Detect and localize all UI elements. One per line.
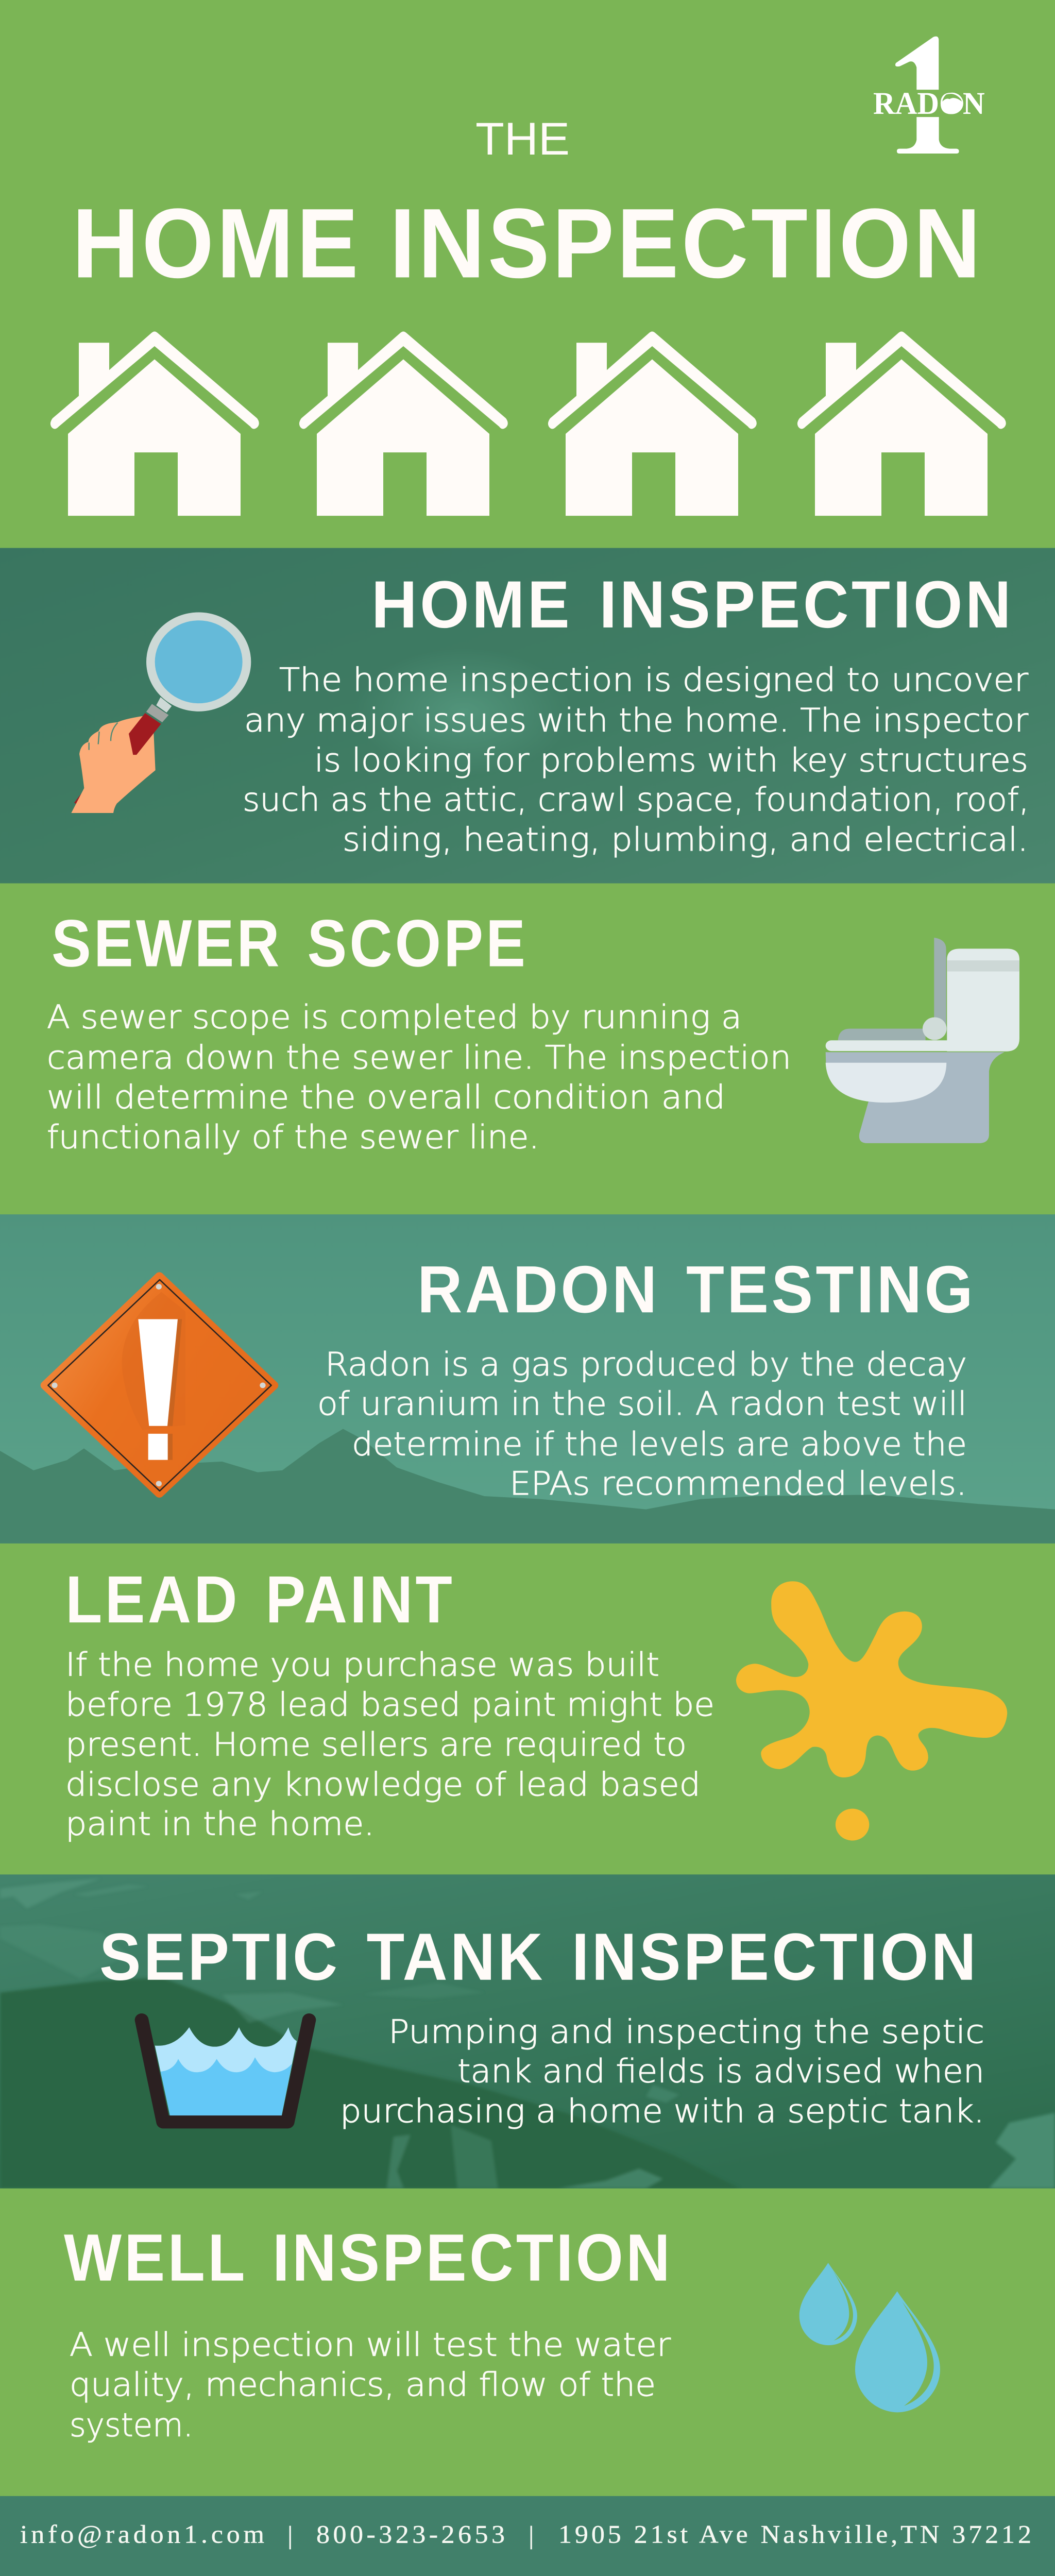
separator: | <box>529 2521 534 2549</box>
text: home inspection description: The home inspection is designed to uncover <box>279 661 1029 699</box>
panel: well inspection <box>0 2189 1055 2496</box>
logo: Radon 1 <box>873 37 985 154</box>
text: sewer scope description: functionally of the sewer line. <box>47 1118 539 1156</box>
text: sewer scope description: will determine the overall condition and <box>47 1078 725 1116</box>
panel: lead paint <box>0 1544 1055 1874</box>
icon: magnifying glass in hand <box>71 612 251 813</box>
icon: house 3 <box>548 331 757 516</box>
icon: house 4 <box>797 331 1006 516</box>
heading: sewer scope: SEWER SCOPE <box>52 906 528 981</box>
icon: toilet <box>826 938 1019 1143</box>
panel: radon testing <box>0 1214 1055 1544</box>
text: address: 1905 21st Ave Nashville,TN 37212 <box>558 2520 1031 2548</box>
text: lead paint description: present. Home sellers are required to <box>65 1726 687 1764</box>
icon: warning sign <box>45 1277 274 1494</box>
text: lead paint description: If the home you purchase was built <box>65 1646 659 1684</box>
text: home inspection description: is looking for problems with key structures <box>314 742 1028 779</box>
icon: water tank <box>142 2020 309 2122</box>
text: radon testing description: Radon is a gas produced by the decay <box>325 1346 967 1383</box>
text: well inspection description <box>70 2326 671 2444</box>
icon: paint splat <box>736 1581 1007 1841</box>
text: email: info@radon1.com <box>20 2520 264 2548</box>
panel: home inspection <box>0 548 1055 884</box>
text: septic tank description: purchasing a home with a septic tank. <box>340 2093 984 2130</box>
text: radon testing description <box>317 1346 967 1503</box>
heading: well inspection: WELL INSPECTION <box>64 2221 673 2295</box>
text: septic tank description: tank and fields is advised when <box>457 2053 984 2090</box>
text: sewer scope description: A sewer scope is completed by running a <box>47 998 742 1036</box>
text: home inspection description: any major issues with the home. The inspector <box>244 702 1029 739</box>
text: radon testing description: EPAs recommended levels. <box>509 1465 967 1503</box>
text: home inspection description: siding, heating, plumbing, and electrical. <box>343 821 1028 859</box>
separator: | <box>287 2521 293 2549</box>
text: lead paint description: paint in the home. <box>65 1805 375 1843</box>
text: septic tank description <box>340 2013 984 2130</box>
text: home inspection description <box>243 661 1029 859</box>
text: home inspection description: such as the attic, crawl space, foundation, roof, <box>243 781 1029 819</box>
text: sewer scope description: camera down the sewer line. The inspection <box>47 1039 791 1077</box>
text: radon testing description: determine if the levels are above the <box>352 1426 967 1463</box>
icon: house 1 <box>50 331 259 516</box>
panel: sewer scope <box>0 884 1055 1214</box>
text: lead paint description: before 1978 lead based paint might be <box>65 1686 714 1723</box>
panel: header <box>0 0 1055 548</box>
text: well inspection description: system. <box>70 2406 193 2444</box>
text: sewer scope description <box>47 998 791 1156</box>
text: lead paint description: disclose any knowledge of lead based <box>65 1766 701 1804</box>
text: phone: 800-323-2653 <box>316 2520 505 2548</box>
icon: water drops <box>799 2263 940 2412</box>
logo: Radon 1: RADON <box>873 86 985 121</box>
heading: lead paint: LEAD PAINT <box>65 1562 455 1637</box>
text: well inspection description: A well inspection will test the water <box>70 2326 671 2364</box>
text: lead paint description <box>65 1646 714 1843</box>
heading: THE: THE <box>475 113 570 164</box>
icon: house 2 <box>299 331 508 516</box>
heading: radon testing: RADON TESTING <box>417 1252 976 1327</box>
text: septic tank description: Pumping and inspecting the septic <box>388 2013 984 2050</box>
text: well inspection description: quality, mechanics, and flow of the <box>70 2366 656 2403</box>
panel: footer contact bar <box>0 2496 1055 2576</box>
panel: septic tank inspection <box>0 1874 1055 2189</box>
text: radon testing description: of uranium in the soil. A radon test will <box>317 1385 967 1423</box>
